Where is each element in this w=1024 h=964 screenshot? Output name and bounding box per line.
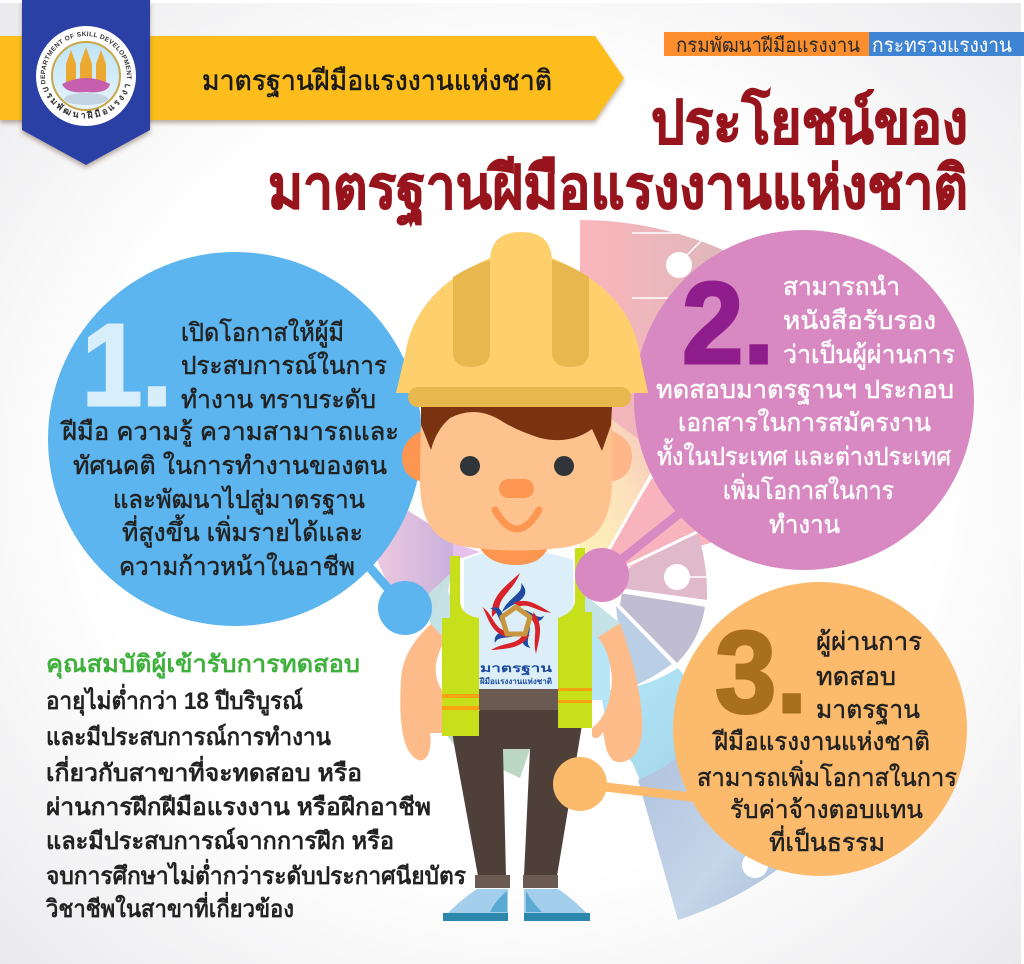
panel: benefit 1: ที่สูงขึ้น เพิ่มรายได้และ	[122, 514, 363, 548]
panel: benefit 2: เพิ่มโอกาสในการ	[723, 473, 894, 505]
connector: benefit 3	[553, 757, 700, 811]
right arm	[592, 623, 642, 762]
panel: benefit 2: 2.	[682, 258, 774, 388]
panel: benefit 2: สามารถนำ	[783, 273, 900, 301]
nose	[499, 479, 534, 498]
panel: benefit 3	[673, 582, 967, 876]
department tag	[664, 32, 1024, 57]
hard hat	[396, 232, 648, 393]
panel: benefit 3: มาตรฐาน	[816, 696, 920, 724]
belt	[479, 689, 558, 710]
header ribbon	[0, 36, 624, 120]
badge pennant with seal	[18, 0, 154, 170]
panel: benefit 2: ว่าเป็นผู้ผ่านการ	[783, 339, 955, 370]
connector: benefit 2	[575, 505, 690, 602]
qualifications text: จบการศึกษาไม่ต่ำกว่าระดับประกาศนียบัตร	[46, 858, 466, 890]
panel: benefit 1: ประสบการณ์ในการ	[181, 351, 387, 380]
vest stripes	[442, 688, 592, 710]
panel: benefit 2: เอกสารในการสมัครงาน	[678, 408, 931, 437]
panel: candidate qualifications	[46, 651, 466, 923]
background fan of sectors	[377, 220, 790, 920]
face	[420, 405, 612, 550]
qualifications heading: คุณสมบัติผู้เข้ารับการทดสอบ	[46, 651, 360, 680]
hair	[421, 407, 612, 451]
panel: benefit 3: รับค่าจ้างตอบแทน	[730, 796, 923, 824]
panel: benefit 2: ทดสอบมาตรฐานฯ ประกอบ	[656, 376, 954, 404]
qualifications text: เกี่ยวกับสาขาที่จะทดสอบ หรือ	[46, 755, 362, 787]
sleeves	[430, 585, 620, 638]
department tag: กระทรวงแรงงาน	[872, 35, 1012, 57]
panel: benefit 2: ทั้งในประเทศ และต่างประเทศ	[657, 438, 951, 471]
pants	[452, 710, 582, 876]
panel: benefit 1: ทำงาน ทราบระดับ	[181, 386, 376, 414]
vest	[442, 548, 592, 736]
shirt	[464, 551, 575, 700]
qualifications text: ผ่านการฝึกฝีมือแรงงาน หรือฝึกอาชีพ	[46, 794, 431, 821]
qualifications text: อายุไม่ต่ำกว่า 18 ปีบริบูรณ์	[46, 683, 303, 717]
shirt logo: ฝีมือแรงงานแห่งชาติ	[479, 676, 552, 686]
panel: benefit 3: 3.	[715, 607, 807, 737]
main title	[268, 87, 968, 226]
left arm	[400, 623, 445, 760]
qualifications text	[46, 683, 466, 923]
panel: benefit 2	[634, 230, 974, 570]
panel: benefit 1: ทัศนคติ ในการทำงานของตน	[73, 451, 387, 480]
panel: benefit 3: ผู้ผ่านการ	[816, 628, 922, 657]
panel: benefit 3: ฝีมือแรงงานแห่งชาติ	[712, 728, 930, 756]
panel: benefit 3: ที่เป็นธรรม	[769, 825, 885, 857]
qualifications text: และมีประสบการณ์การทำงาน	[46, 723, 332, 751]
neck	[480, 548, 548, 565]
panel: benefit 1: และพัฒนาไปสู่มาตรฐาน	[113, 485, 365, 515]
panel: benefit 3: สามารถเพิ่มโอกาสในการ	[697, 760, 957, 792]
panel: benefit 1	[48, 252, 422, 626]
qualifications text: และมีประสบการณ์จากการฝึก หรือ	[46, 827, 394, 855]
mouth	[495, 510, 539, 529]
shoes	[443, 889, 590, 920]
panel: benefit 1: 1.	[82, 300, 172, 430]
panel: benefit 1: เปิดโอกาสให้ผู้มี	[181, 318, 344, 348]
header ribbon label: มาตรฐานฝีมือแรงงานแห่งชาติ	[202, 65, 552, 97]
qualifications text: วิชาชีพในสาขาที่เกี่ยวข้อง	[46, 891, 294, 923]
panel: benefit 1: ฝีมือ ความรู้ ความสามารถและ	[60, 418, 399, 447]
ears	[402, 430, 632, 482]
department tag: กรมพัฒนาฝีมือแรงงาน	[676, 35, 860, 57]
character: construction worker	[396, 232, 648, 921]
shirt logo: มาตรฐาน	[480, 663, 553, 676]
panel: benefit 2: ทำงาน	[769, 511, 840, 539]
main title: ประโยชน์ของ	[651, 87, 968, 156]
cuffs	[475, 875, 558, 888]
panel: benefit 1: ความก้าวหน้าในอาชีพ	[119, 552, 355, 581]
eyes	[460, 456, 480, 476]
panel: benefit 3: ทดสอบ	[816, 663, 896, 691]
connector: benefit 1	[365, 562, 432, 635]
panel: benefit 2: หนังสือรับรอง	[783, 307, 936, 335]
shirt logo	[476, 573, 554, 686]
badge pennant with seal: DEPARTMENT OF SKILL DEVELOPMENT	[40, 32, 132, 84]
